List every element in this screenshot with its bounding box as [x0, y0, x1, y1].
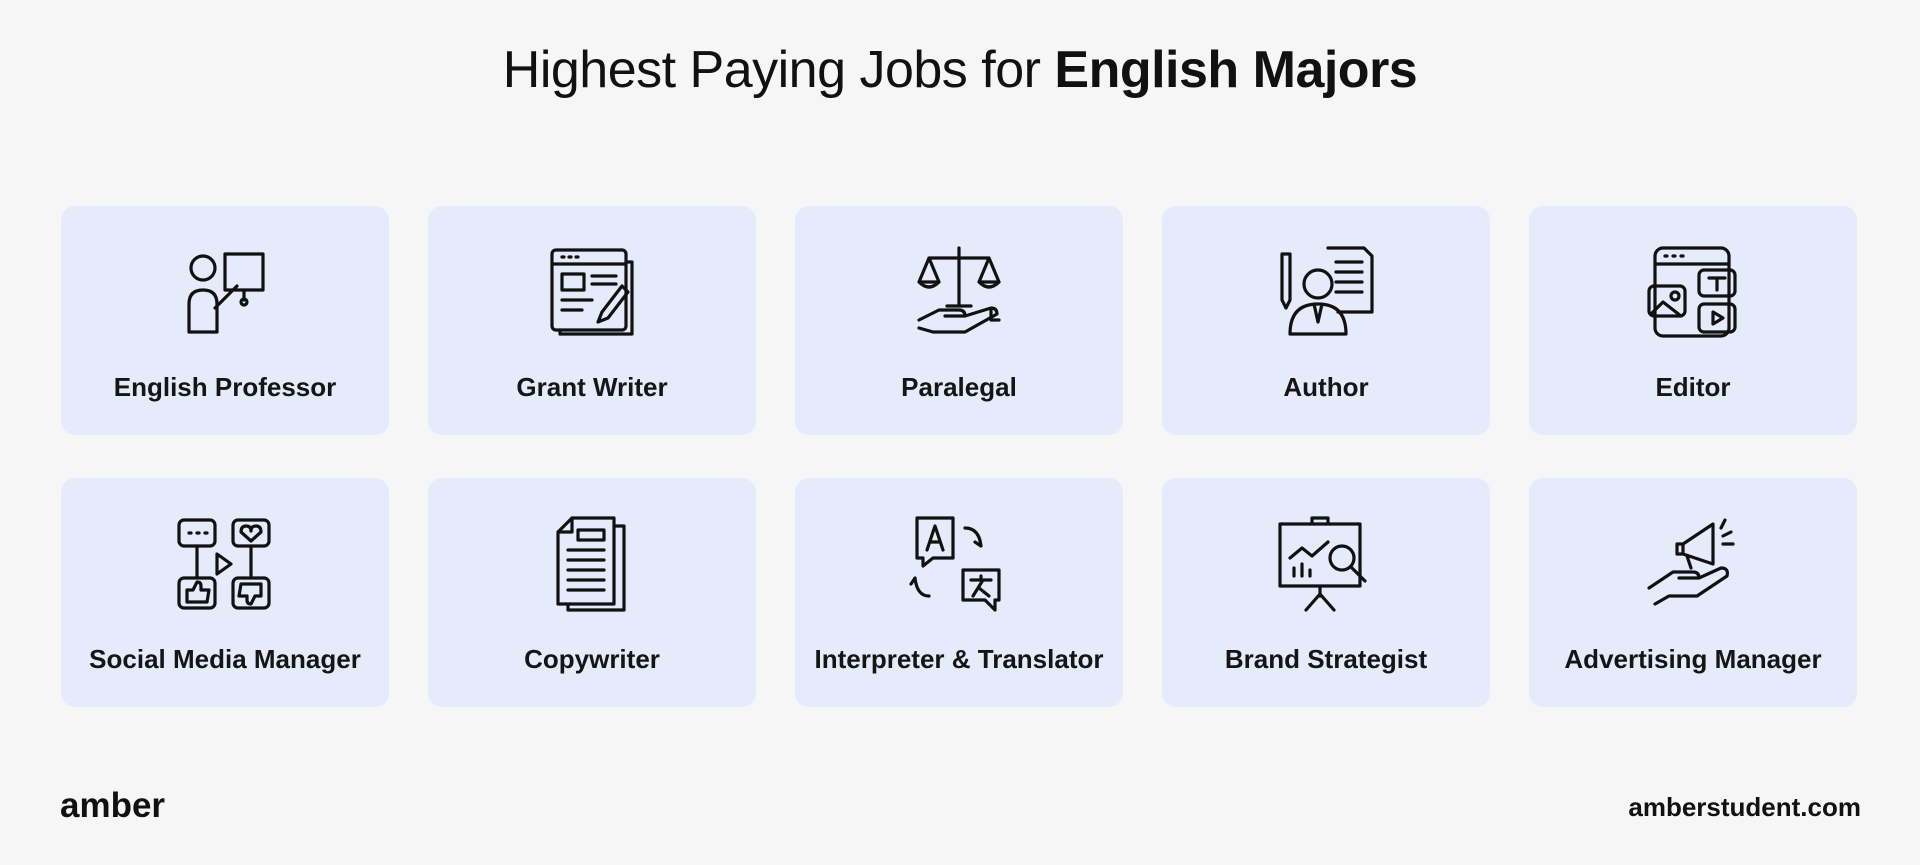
card: Interpreter & Translator: Interpreter & Translator [814, 644, 1103, 674]
card: Advertising Manager: Advertising Manager [1564, 644, 1822, 674]
card: Copywriter [428, 478, 756, 707]
icon: presentation board with magnifier [1278, 516, 1367, 612]
card: Author [1162, 206, 1490, 435]
card: Brand Strategist: Brand Strategist [1225, 644, 1427, 674]
card: Paralegal [795, 206, 1123, 435]
icon: stacked documents [556, 516, 626, 612]
icon: social media network [177, 518, 271, 610]
card: Paralegal: Paralegal [901, 372, 1017, 402]
card: Copywriter: Copywriter [524, 644, 660, 674]
card: Grant Writer [428, 206, 756, 435]
footer url: amberstudent.com [1628, 792, 1861, 822]
icon: media editor [1647, 246, 1737, 338]
card: Editor [1529, 206, 1857, 435]
card: Interpreter & Translator [795, 478, 1123, 707]
logo: amber: amber [60, 786, 165, 825]
card: Brand Strategist [1162, 478, 1490, 707]
title: Highest Paying Jobs for English Majors [503, 41, 1417, 99]
icon: translation bubbles [909, 516, 1001, 612]
card: Editor: Editor [1655, 372, 1731, 402]
card: Social Media Manager [61, 478, 389, 707]
icon: author with paper [1280, 246, 1374, 336]
icon: document with pen [550, 248, 634, 336]
icon: megaphone in hand [1647, 518, 1735, 606]
icon: teacher at board [187, 252, 265, 334]
card: Author: Author [1283, 372, 1369, 402]
card: Social Media Manager: Social Media Manager [89, 644, 361, 674]
card: Grant Writer: Grant Writer [516, 372, 668, 402]
card: English Professor [61, 206, 389, 435]
card: English Professor: English Professor [114, 372, 336, 402]
icon: scales on hand [917, 246, 1001, 334]
card: Advertising Manager [1529, 478, 1857, 707]
